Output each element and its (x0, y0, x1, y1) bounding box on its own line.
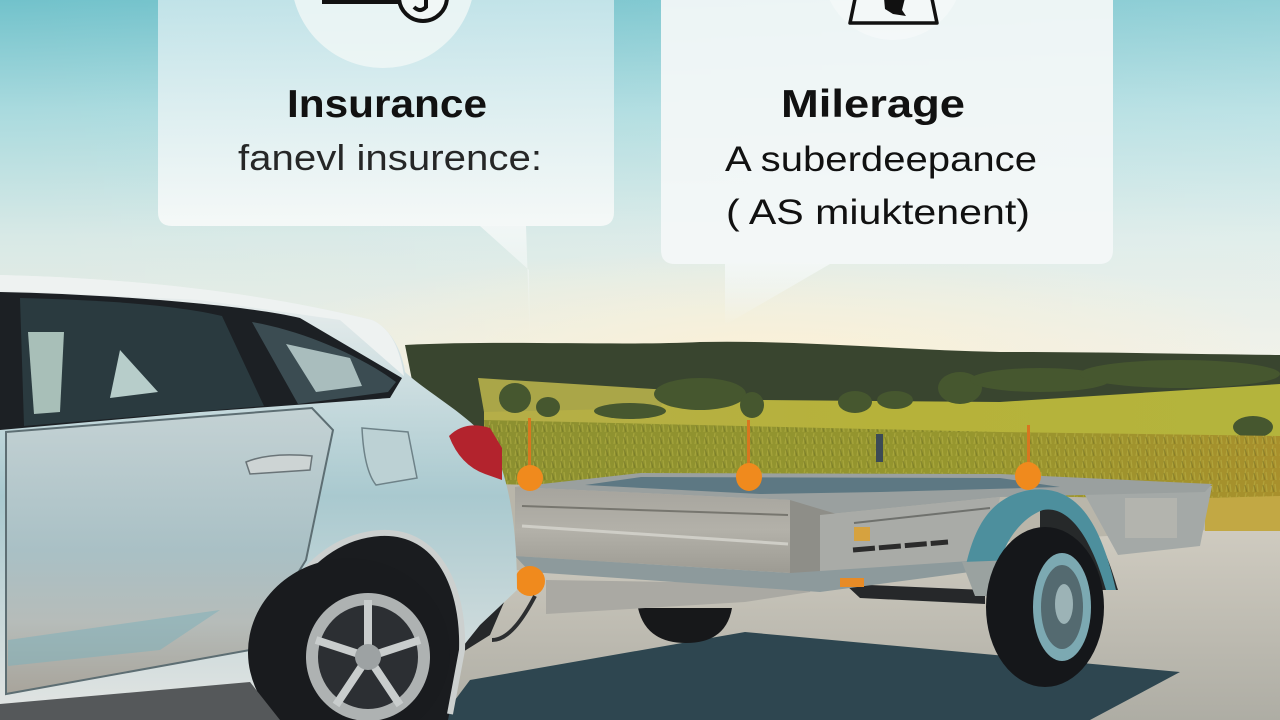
car (0, 275, 517, 720)
car fuel flap (362, 428, 417, 485)
car window: front (20, 298, 264, 426)
background: sky brightening to the right (0, 0, 1280, 365)
trailer far wheel (638, 608, 732, 643)
text: mileage description line 2: ( AS miuktenent) (726, 193, 1030, 232)
background: sky (0, 0, 1280, 440)
icon: mileage road sign (850, 0, 937, 23)
car roof highlight (0, 275, 404, 376)
car wheel arch lip (290, 533, 462, 714)
panel box: mileage (661, 0, 1113, 264)
heading: mileage: Milerage (781, 83, 965, 126)
car lower highlight (8, 610, 220, 666)
marker post 1 (517, 418, 543, 491)
car wheel arch (262, 533, 462, 720)
trailer marker light (840, 578, 864, 587)
trailer label (853, 527, 948, 550)
trailer axle rod (845, 584, 985, 604)
trailer wheel well (1040, 504, 1118, 590)
panel tail: mileage (725, 264, 830, 325)
car door panel (6, 408, 333, 694)
car tail light (449, 425, 502, 480)
trailer near wheel (986, 527, 1104, 687)
trailer lower rail (515, 556, 985, 592)
heading: insurance: Insurance (287, 83, 487, 126)
trailer side panel (515, 487, 790, 573)
car window: rear (252, 322, 396, 404)
car sill shadow (0, 682, 280, 720)
trailer shadow (440, 632, 1180, 720)
icon: insurance key and coin (322, 0, 447, 21)
text: insurance description: fanevl insurence: (238, 137, 542, 178)
trailer chassis beam (546, 580, 815, 614)
road (0, 530, 1280, 720)
trailer front panel (820, 497, 1000, 578)
car side window frame (0, 292, 402, 430)
tow hitch cable (492, 596, 535, 640)
panel: mileage (661, 0, 1113, 325)
trailer fender (966, 489, 1116, 590)
marker post 3 (1015, 425, 1041, 490)
car body (0, 275, 517, 718)
panel: insurance (158, 0, 614, 345)
trailer bed (515, 473, 1212, 515)
landscape: forest, hills and crop field (405, 342, 1280, 531)
icon disc: mileage (823, 0, 963, 40)
car underbody (0, 600, 505, 720)
hitch marker light (515, 566, 545, 596)
marker post 2 (736, 420, 762, 491)
background: sun glow (300, 170, 1250, 365)
panel tail: insurance (480, 226, 530, 345)
car door handle (246, 455, 312, 474)
trailer (492, 418, 1212, 687)
trailer corner post (790, 500, 840, 578)
car wheel (248, 558, 450, 720)
icon disc: insurance (291, 0, 475, 68)
trailer far side panel (1080, 486, 1212, 555)
text: mileage description line 1: A suberdeepance (725, 140, 1037, 179)
panel box: insurance (158, 0, 614, 226)
